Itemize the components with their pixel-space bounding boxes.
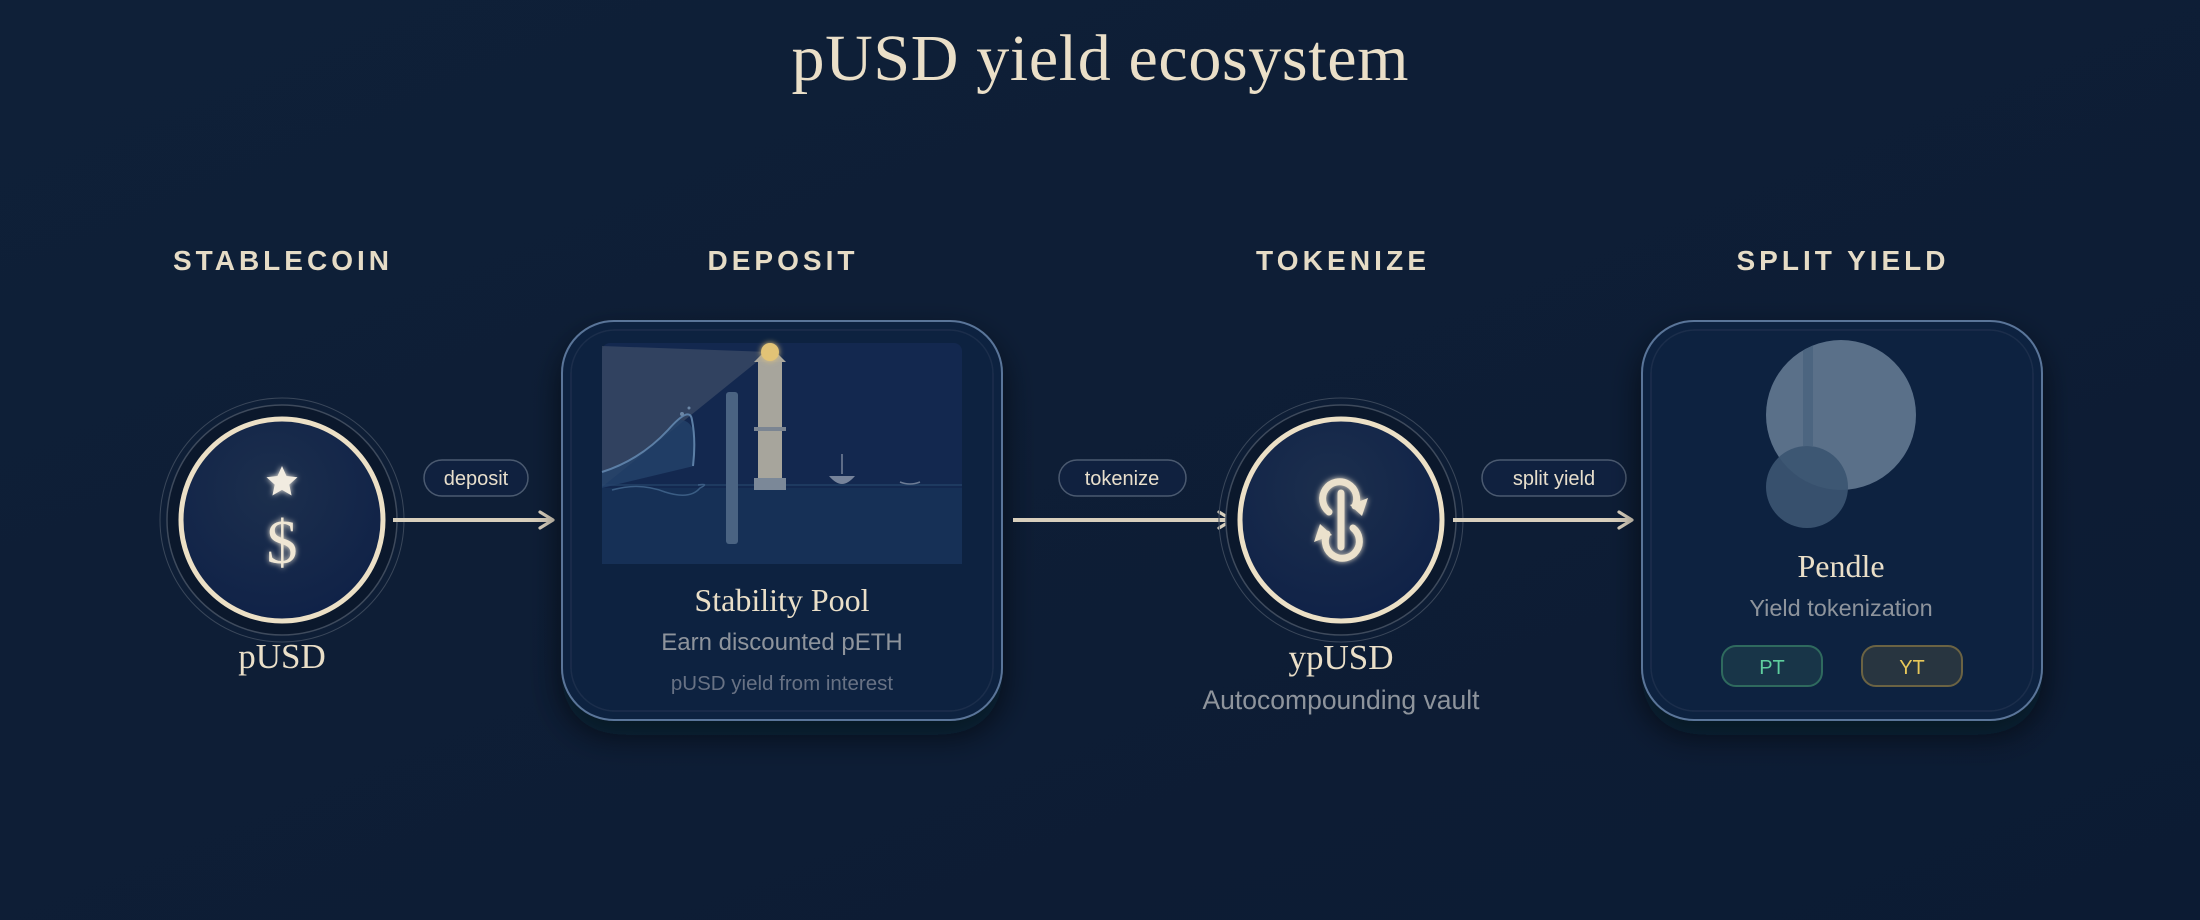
label: pUSD: pUSD [238,637,326,676]
text: stability pool title: Stability Pool [694,582,870,618]
text: pUSD yield from interest: pUSD yield from interest [671,672,893,695]
panel: stability pool [562,321,1002,720]
heading: tokenize: TOKENIZE [1256,245,1426,276]
node: pUSD coin [160,398,404,642]
icon: yearn logo [1314,482,1368,558]
badge: YT [1862,646,1962,686]
icon: star [266,466,298,496]
badge: PT: PT [1759,657,1785,679]
text: yield tokenization: Yield tokenization [1749,595,1933,621]
text: pendle: Pendle [1797,548,1885,584]
illustration: lighthouse [602,343,962,564]
arrow: split yield: split yield [1513,468,1595,490]
heading: deposit: DEPOSIT [708,245,854,276]
panel: pendle [1642,321,2042,720]
badge: PT [1722,646,1822,686]
text: earn discounted pETH: Earn discounted pETH [661,629,903,656]
arrow: tokenize [1013,460,1232,520]
arrow: split yield [1453,460,1632,520]
icon: dollar: $ [266,509,298,577]
label: ypUSD: ypUSD [1288,638,1394,677]
arrow: deposit [393,460,553,520]
text: autocompounding vault: Autocompounding vault [1203,685,1480,715]
icon: pendle logo [1766,335,1916,528]
arrow: tokenize: tokenize [1085,468,1159,490]
heading: split yield: SPLIT YIELD [1736,245,1946,276]
title: pUSD yield ecosystem [792,22,1408,95]
badge: YT: YT [1899,657,1925,679]
node: ypUSD coin [1219,398,1463,642]
heading: stablecoin: STABLECOIN [173,245,389,276]
arrow: deposit: deposit [444,468,509,490]
